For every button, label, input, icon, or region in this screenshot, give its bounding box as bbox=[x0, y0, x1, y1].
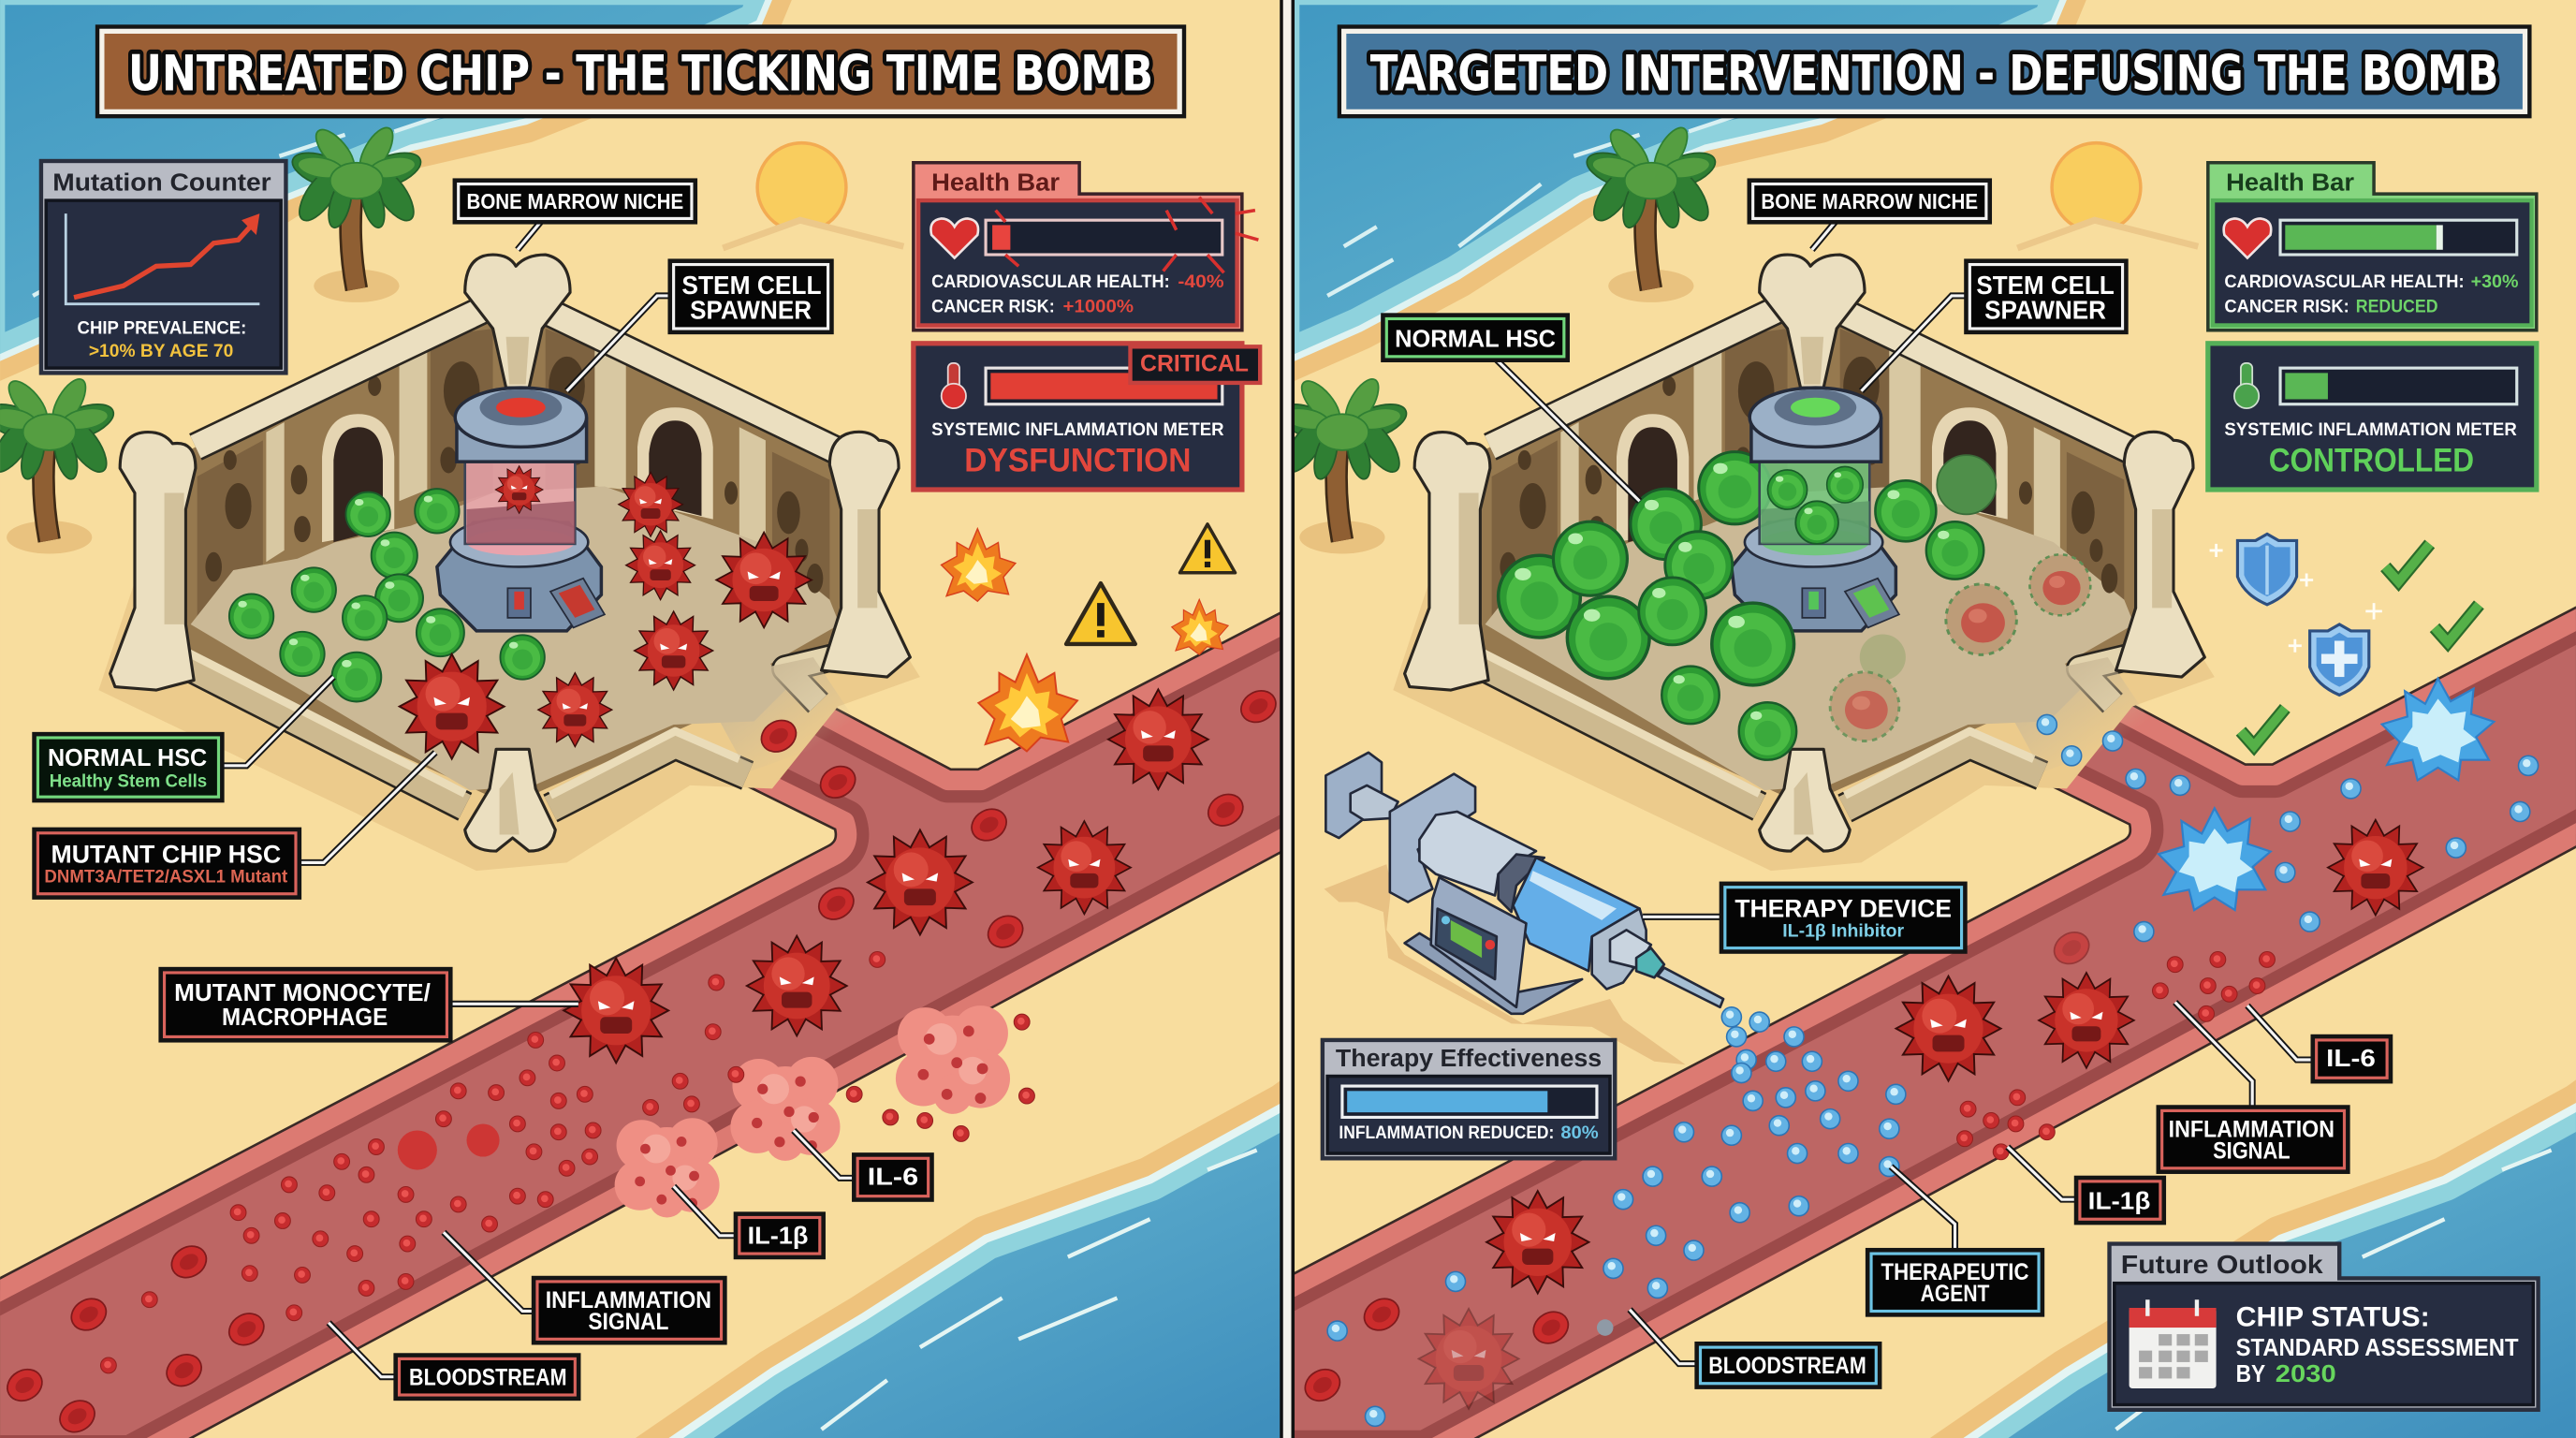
red blood cells left bbox=[2, 684, 1281, 1438]
label: bloodstream right bbox=[1630, 1310, 1878, 1385]
label: therapeutic agent bbox=[1869, 1167, 2041, 1313]
health readouts: CARDIOVASCULAR HEALTH: bbox=[931, 272, 1170, 292]
label: inflammation signal right: INFLAMMATION bbox=[2169, 1117, 2334, 1142]
panel: inflammation meter right bbox=[2208, 344, 2537, 490]
chip status text: STANDARD ASSESSMENT bbox=[2236, 1333, 2519, 1361]
label: mutant monocyte macrophage: MACROPHAGE bbox=[222, 1003, 388, 1031]
label: stem cell spawner left bbox=[567, 263, 829, 391]
label: bone marrow niche right bbox=[1751, 183, 1988, 250]
label: mutant CHIP HSC: MUTANT CHIP HSC bbox=[51, 839, 281, 868]
bone marrow niche right bbox=[1393, 255, 2215, 871]
label: bloodstream left bbox=[329, 1323, 577, 1397]
prevalence text bbox=[78, 318, 246, 361]
label: IL-6 left: IL-6 bbox=[868, 1162, 918, 1190]
warning triangles bbox=[1066, 524, 1235, 644]
label: IL-1β left: IL-1β bbox=[748, 1222, 809, 1250]
title: untreated CHIP: UNTREATED CHIP - THE TICKING TIME BOMB bbox=[128, 46, 1153, 103]
icon: therapy syringe device bbox=[1325, 753, 1723, 1064]
label: mutant monocyte macrophage bbox=[163, 971, 578, 1038]
health readouts bbox=[931, 272, 1224, 316]
label: bone marrow niche left: BONE MARROW NICHE bbox=[466, 189, 683, 213]
blue splashes bbox=[2159, 679, 2494, 910]
inflammation signal particles left bbox=[100, 952, 1034, 1373]
panel: mutation counter bbox=[41, 161, 285, 373]
red blood cells right bbox=[1299, 926, 2095, 1407]
effectiveness readout: INFLAMMATION REDUCED: bbox=[1339, 1123, 1554, 1143]
title: untreated CHIP bbox=[98, 28, 1183, 115]
health readouts: +1000% bbox=[1063, 297, 1134, 316]
normal HSC cells right bbox=[1699, 452, 1983, 580]
label: inflammation signal left: SIGNAL bbox=[588, 1310, 668, 1335]
label: inflammation signal right: SIGNAL bbox=[2213, 1138, 2291, 1164]
mutant monocytes right bbox=[1419, 820, 2423, 1409]
dysfunction status: DYSFUNCTION bbox=[964, 443, 1191, 479]
label: stem cell spawner left: STEM CELL bbox=[681, 271, 822, 300]
label: inflammation signal left: INFLAMMATION bbox=[546, 1288, 711, 1313]
panel: therapy effectiveness bbox=[1323, 1040, 1615, 1158]
future outlook heading: Future Outlook bbox=[2121, 1250, 2323, 1279]
health readouts bbox=[2224, 272, 2519, 316]
icon: heart bbox=[930, 218, 978, 258]
panel: right background beach and ocean bbox=[1278, 0, 2576, 1438]
label: mutant CHIP HSC bbox=[37, 753, 435, 895]
normal HSC cells left bbox=[229, 489, 545, 701]
controlled status: CONTROLLED bbox=[2269, 443, 2474, 479]
health bar heading: Health Bar bbox=[2226, 169, 2354, 197]
health readouts: CANCER RISK: bbox=[2224, 297, 2349, 316]
chip status text: BY bbox=[2236, 1359, 2266, 1387]
label: mutant monocyte macrophage: MUTANT MONOCYTE/ bbox=[174, 978, 432, 1006]
mutant CHIP cells in niche bbox=[400, 472, 812, 759]
explosions bbox=[942, 529, 1228, 751]
icon: thermometer red bbox=[942, 363, 966, 408]
panel: health bar right bbox=[2208, 163, 2537, 330]
icon: check marks bbox=[2241, 544, 2479, 746]
health readouts: REDUCED bbox=[2356, 297, 2438, 316]
label: inflammation signal left bbox=[444, 1232, 723, 1341]
icon: calendar bbox=[2130, 1299, 2217, 1388]
label: therapeutic agent: AGENT bbox=[1921, 1282, 1989, 1307]
health readouts: CARDIOVASCULAR HEALTH: bbox=[2224, 272, 2465, 292]
health readouts: CANCER RISK: bbox=[931, 297, 1055, 316]
inflammation meter caption: SYSTEMIC INFLAMMATION METER bbox=[2224, 420, 2517, 440]
icon: palm tree upper left bbox=[287, 123, 425, 302]
health meter bbox=[986, 198, 1258, 272]
panel: inflammation meter left bbox=[914, 344, 1260, 490]
bloodstream vessel right bbox=[1262, 603, 2576, 1438]
label: bloodstream right: BLOODSTREAM bbox=[1708, 1354, 1866, 1379]
mutation counter heading: Mutation Counter bbox=[52, 169, 271, 197]
label: stem cell spawner right: STEM CELL bbox=[1976, 271, 2115, 300]
title: targeted intervention bbox=[1340, 28, 2528, 115]
effectiveness bar bbox=[1342, 1086, 1597, 1117]
stem cell spawner left bbox=[437, 388, 605, 631]
health meter bbox=[2280, 220, 2517, 255]
label: IL-6 right: IL-6 bbox=[2326, 1044, 2376, 1072]
panel: left scene, untreated CHIP bbox=[0, 123, 1314, 1438]
icon: thermometer green bbox=[2234, 363, 2259, 408]
chip status text bbox=[2236, 1301, 2519, 1387]
icon: sun right bbox=[2016, 140, 2199, 251]
label: bone marrow niche right: BONE MARROW NICHE bbox=[1761, 189, 1978, 213]
label: therapy device: IL-1β Inhibitor bbox=[1782, 921, 1905, 941]
inflammation meter caption: SYSTEMIC INFLAMMATION METER bbox=[931, 420, 1224, 440]
label: therapy device: THERAPY DEVICE bbox=[1734, 893, 1952, 922]
bloodstream vessel left bbox=[0, 608, 1314, 1438]
label: stem cell spawner right bbox=[1862, 263, 2124, 391]
cytokine clouds IL-6 and IL-1β bbox=[615, 1005, 1010, 1217]
health readouts: +30% bbox=[2471, 272, 2519, 292]
panel divider bbox=[1280, 0, 1295, 1438]
chip status text: 2030 bbox=[2276, 1359, 2336, 1387]
panel: health bar left bbox=[914, 163, 1258, 330]
chip status text: CHIP STATUS: bbox=[2236, 1301, 2430, 1332]
icon: heart bbox=[2224, 218, 2271, 258]
bone marrow niche left bbox=[98, 255, 920, 871]
panel: left background beach and ocean bbox=[0, 0, 1314, 1438]
label: bloodstream left: BLOODSTREAM bbox=[409, 1365, 567, 1390]
icon: sun left bbox=[722, 140, 904, 251]
label: IL-1β right: IL-1β bbox=[2088, 1187, 2150, 1215]
label: inflammation signal right bbox=[2160, 1003, 2346, 1170]
health bar heading: Health Bar bbox=[931, 169, 1060, 197]
label: normal HSC left: Healthy Stem Cells bbox=[50, 772, 207, 792]
normal HSC cluster right bbox=[1499, 489, 1796, 760]
label: mutant CHIP HSC: DNMT3A/TET2/ASXL1 Mutant bbox=[44, 867, 288, 887]
therapeutic agent particles bbox=[1327, 714, 2539, 1426]
label: therapeutic agent: THERAPEUTIC bbox=[1881, 1260, 2029, 1285]
critical tag: CRITICAL bbox=[1140, 352, 1249, 377]
icon: shields bbox=[2210, 534, 2382, 695]
icon: palm tree lower left bbox=[0, 374, 118, 553]
label: bone marrow niche left bbox=[457, 183, 694, 250]
stem cell spawner right bbox=[1732, 388, 1899, 631]
effectiveness readout: 80% bbox=[1560, 1123, 1599, 1143]
label: IL-6 left bbox=[794, 1130, 929, 1197]
label: normal HSC right bbox=[1385, 317, 1640, 501]
prevalence text: CHIP PREVALENCE: bbox=[78, 318, 246, 338]
label: normal HSC right: NORMAL HSC bbox=[1395, 324, 1556, 352]
prevalence line chart bbox=[66, 213, 259, 304]
inflammation gauge bbox=[986, 368, 1222, 404]
prevalence text: >10% BY AGE 70 bbox=[89, 342, 233, 361]
therapy effectiveness heading: Therapy Effectiveness bbox=[1336, 1044, 1602, 1072]
inflammation signal particles right bbox=[1957, 952, 2275, 1160]
inflammation gauge bbox=[2280, 368, 2517, 404]
label: stem cell spawner right: SPAWNER bbox=[1984, 295, 2106, 324]
panel: right scene, targeted intervention bbox=[1262, 123, 2576, 1438]
label: normal HSC left: NORMAL HSC bbox=[48, 743, 207, 771]
icon: palm tree upper right bbox=[1582, 123, 1720, 302]
label: normal HSC left bbox=[37, 677, 333, 799]
label: IL-6 right bbox=[2247, 1005, 2389, 1079]
icon: palm tree lower right bbox=[1295, 378, 1408, 554]
label: IL-1β left bbox=[674, 1186, 822, 1255]
label: therapy device bbox=[1643, 886, 1963, 949]
critical tag bbox=[1131, 346, 1260, 383]
mutant monocytes in bloodstream bbox=[564, 689, 1208, 1063]
faded mutant cells in niche bbox=[1830, 455, 2090, 741]
label: stem cell spawner left: SPAWNER bbox=[690, 295, 812, 324]
label: IL-1β right bbox=[2008, 1147, 2162, 1221]
health readouts: -40% bbox=[1178, 272, 1224, 292]
panel: future outlook bbox=[2110, 1244, 2539, 1410]
